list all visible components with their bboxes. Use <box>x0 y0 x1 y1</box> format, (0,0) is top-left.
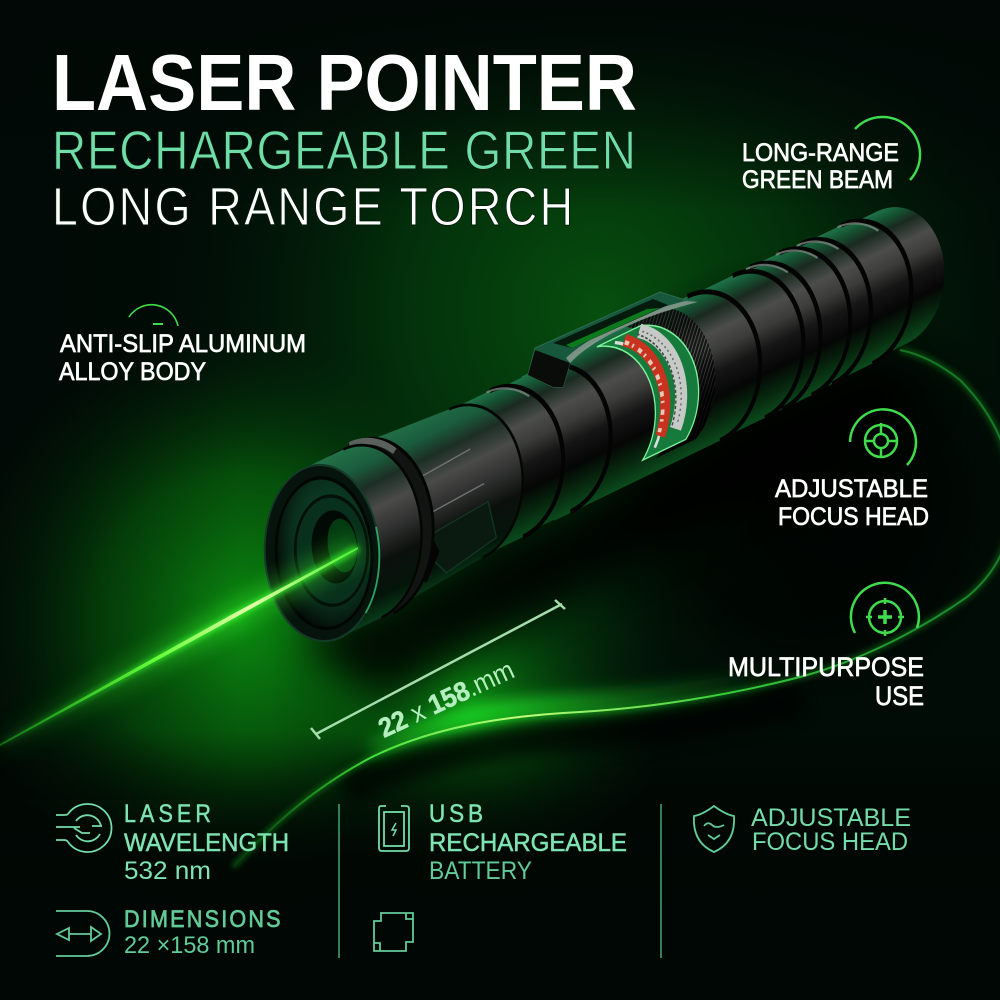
title: RECHARGEABLE GREEN <box>52 120 636 181</box>
bezel <box>303 422 437 637</box>
spec: laser wavelength <box>56 799 289 885</box>
callout: anti-slip aluminum: ALLOY BODY <box>59 358 206 386</box>
knurled grip <box>626 292 728 458</box>
callout: anti-slip aluminum: ANTI-SLIP ALUMINUM <box>60 330 306 358</box>
callout: multipurpose use <box>728 583 924 711</box>
spec: usb rechargeable battery: USB <box>429 800 483 828</box>
icon: phone battery <box>379 806 409 851</box>
grip head <box>344 374 539 616</box>
spec: dimensions: DIMENSIONS <box>124 905 281 932</box>
dimension text: 22 x 158.mm <box>374 655 519 743</box>
body sections <box>440 342 625 561</box>
glowing curve <box>233 350 1000 867</box>
callout: multipurpose use: MULTIPURPOSE <box>728 652 924 682</box>
callout: long-range green beam: GREEN BEAM <box>742 166 893 194</box>
callout: multipurpose use: USE <box>875 681 924 711</box>
head ring <box>330 416 449 625</box>
spec: laser wavelength: LASER <box>124 799 211 827</box>
title: LASER POINTER <box>52 38 637 127</box>
spec: adjustable focus head: FOCUS HEAD <box>752 828 908 856</box>
flashlight body <box>249 168 962 664</box>
icon: chip square <box>374 913 413 951</box>
icon: shield <box>694 806 734 852</box>
spec: adjustable focus head: ADJUSTABLE <box>751 804 911 832</box>
callout: long-range green beam: LONG-RANGE <box>742 139 899 167</box>
callout: anti-slip aluminum <box>59 305 306 386</box>
spec: dimensions <box>56 905 281 959</box>
icon: laser wave <box>56 804 111 852</box>
callout: adjustable focus head: FOCUS HEAD <box>778 503 929 531</box>
torch shadow <box>300 365 930 700</box>
front face and lens <box>249 443 395 663</box>
title <box>52 38 637 237</box>
laser beam <box>0 547 358 746</box>
spec: usb rechargeable battery: RECHARGEABLE <box>429 829 627 857</box>
spec: adjustable focus head <box>694 804 911 856</box>
product label <box>597 306 709 469</box>
spec: laser wavelength: 532 nm <box>124 857 211 885</box>
tail cap <box>811 187 957 375</box>
spec: dimensions: 22 ×158 mm <box>124 932 255 959</box>
spec: laser wavelength: WAVELENGTH <box>124 829 289 857</box>
groove lines <box>687 197 925 441</box>
dimension line <box>311 600 565 739</box>
spec: usb rechargeable battery <box>379 800 627 885</box>
spec: usb rechargeable battery: BATTERY <box>429 857 532 885</box>
title: LONG RANGE TORCH <box>52 176 573 237</box>
divider <box>338 804 340 958</box>
divider <box>660 804 662 958</box>
clip <box>528 292 697 387</box>
callout: adjustable focus head: ADJUSTABLE <box>775 475 928 503</box>
callout: adjustable focus head <box>775 409 929 531</box>
callout: long-range green beam <box>742 117 920 194</box>
icon: width arrows <box>56 911 110 956</box>
groove highlights <box>486 206 878 417</box>
ribbed tail sections <box>522 197 925 521</box>
